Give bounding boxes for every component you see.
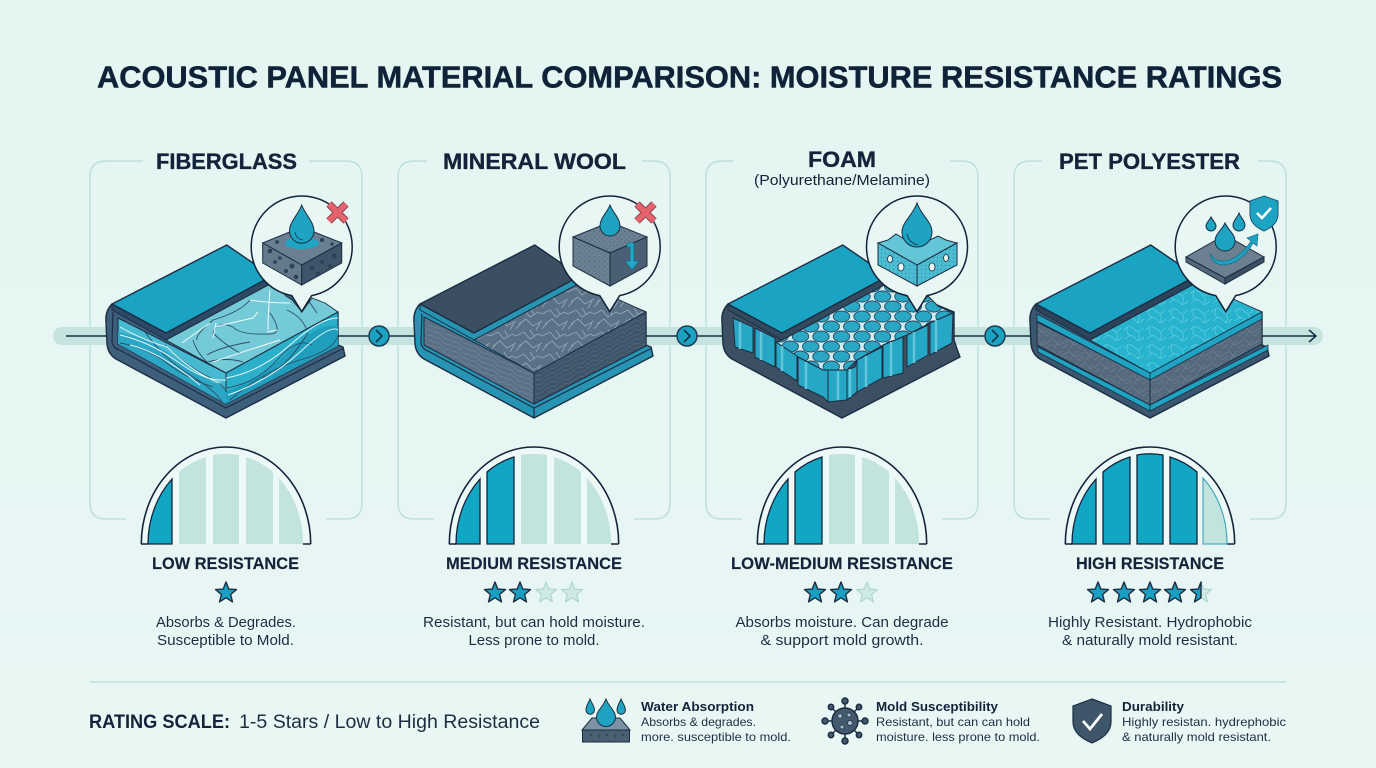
icon: mold spore xyxy=(822,698,868,744)
stars: four and a half xyxy=(1088,582,1212,602)
connector icon 3 xyxy=(985,326,1005,346)
foam cells xyxy=(733,318,753,353)
panel heading: foam: (Polyurethane/Melamine) xyxy=(754,173,930,189)
magnifier callout: fiberglass xyxy=(251,196,352,312)
timeline arrow xyxy=(53,327,1323,345)
legend: mold susceptibility xyxy=(822,698,1040,744)
legend: mold susceptibility: moisture. less prone to mold. xyxy=(876,730,1040,744)
description: mineral wool: Less prone to mold. xyxy=(468,633,600,649)
icon: water repellent plate xyxy=(1186,235,1264,284)
legend: mold susceptibility: Mold Susceptibility xyxy=(876,700,998,714)
rating label: medium: MEDIUM RESISTANCE xyxy=(446,555,622,573)
illustration: fiberglass panel xyxy=(106,245,345,418)
rating scale xyxy=(89,712,540,733)
magnifier callout: pet polyester xyxy=(1175,196,1278,312)
gauge: foam xyxy=(757,447,927,544)
panel heading: fiberglass: FIBERGLASS xyxy=(156,149,297,174)
description: mineral wool xyxy=(423,615,645,649)
gauge: fiberglass xyxy=(141,447,311,544)
rating label: low-medium: LOW-MEDIUM RESISTANCE xyxy=(731,555,953,573)
icon: porous block xyxy=(263,227,342,285)
legend: durability: & naturally mold resistant. xyxy=(1122,730,1271,744)
legend: water absorption: Water Absorption xyxy=(641,700,754,714)
legend: durability: Highly resistan. hydrephobic xyxy=(1122,715,1286,729)
legend: durability xyxy=(1073,699,1286,744)
stars: two of four xyxy=(484,582,582,602)
panel heading: foam xyxy=(754,147,930,189)
connector icon 1 xyxy=(369,326,389,346)
icon: water drop xyxy=(290,205,314,243)
icon: wool block xyxy=(573,222,647,286)
icon: water drop xyxy=(600,205,620,236)
description: fiberglass: Absorbs & Degrades. xyxy=(156,615,296,631)
title: ACOUSTIC PANEL MATERIAL COMPARISON: MOISTURE RESISTANCE RATINGS xyxy=(97,60,1282,94)
rating scale: 1-5 Stars / Low to High Resistance xyxy=(239,712,540,733)
icon: downward arrow xyxy=(625,243,639,270)
panel heading: pet polyester: PET POLYESTER xyxy=(1059,149,1240,174)
illustration: foam panel xyxy=(722,245,960,418)
icon: wet foam block xyxy=(878,234,957,286)
description: mineral wool: Resistant, but can hold moisture. xyxy=(423,615,645,631)
icon: red cross xyxy=(637,204,654,221)
icon: water on block xyxy=(582,699,630,742)
illustration: pet polyester panel xyxy=(1030,245,1269,418)
legend: mold susceptibility: Resistant, but can can hold xyxy=(876,715,1030,729)
gauge: mineral wool xyxy=(449,447,619,544)
rating label: high: HIGH RESISTANCE xyxy=(1076,555,1224,573)
stars: one xyxy=(216,582,236,602)
description: pet polyester: Highly Resistant. Hydrophobic xyxy=(1048,615,1252,631)
legend: durability: Durability xyxy=(1122,700,1184,714)
connector icon 2 xyxy=(677,326,697,346)
description: foam: & support mold growth. xyxy=(760,633,924,649)
description: fiberglass: Susceptible to Mold. xyxy=(157,633,294,649)
illustration: mineral wool panel xyxy=(414,245,653,418)
icon: shield xyxy=(1073,699,1111,743)
icon: shield check xyxy=(1250,196,1278,231)
panel heading: foam: FOAM xyxy=(808,147,876,172)
legend: water absorption: more. susceptible to mold. xyxy=(641,730,791,744)
icon: deflect arrow xyxy=(1210,234,1258,265)
icon: water drop xyxy=(902,203,932,247)
icon: water drops xyxy=(1206,213,1245,251)
description: foam xyxy=(736,615,948,649)
description: pet polyester: & naturally mold resistant. xyxy=(1062,633,1238,649)
panel heading: mineral wool: MINERAL WOOL xyxy=(443,149,626,174)
legend: water absorption xyxy=(582,699,791,744)
icon: red cross xyxy=(329,204,346,221)
description: foam: Absorbs moisture. Can degrade xyxy=(736,615,948,631)
rating scale: RATING SCALE: xyxy=(89,712,230,733)
description: pet polyester xyxy=(1048,615,1252,649)
panel outlines xyxy=(90,161,1286,519)
stars: two of three xyxy=(804,582,878,602)
gauge: pet polyester xyxy=(1065,447,1235,544)
magnifier callout: foam xyxy=(866,196,968,312)
magnifier callout: mineral wool xyxy=(559,196,660,312)
legend: water absorption: Absorbs & degrades. xyxy=(641,715,756,729)
description: fiberglass xyxy=(156,615,296,649)
rating label: low: LOW RESISTANCE xyxy=(152,555,299,573)
